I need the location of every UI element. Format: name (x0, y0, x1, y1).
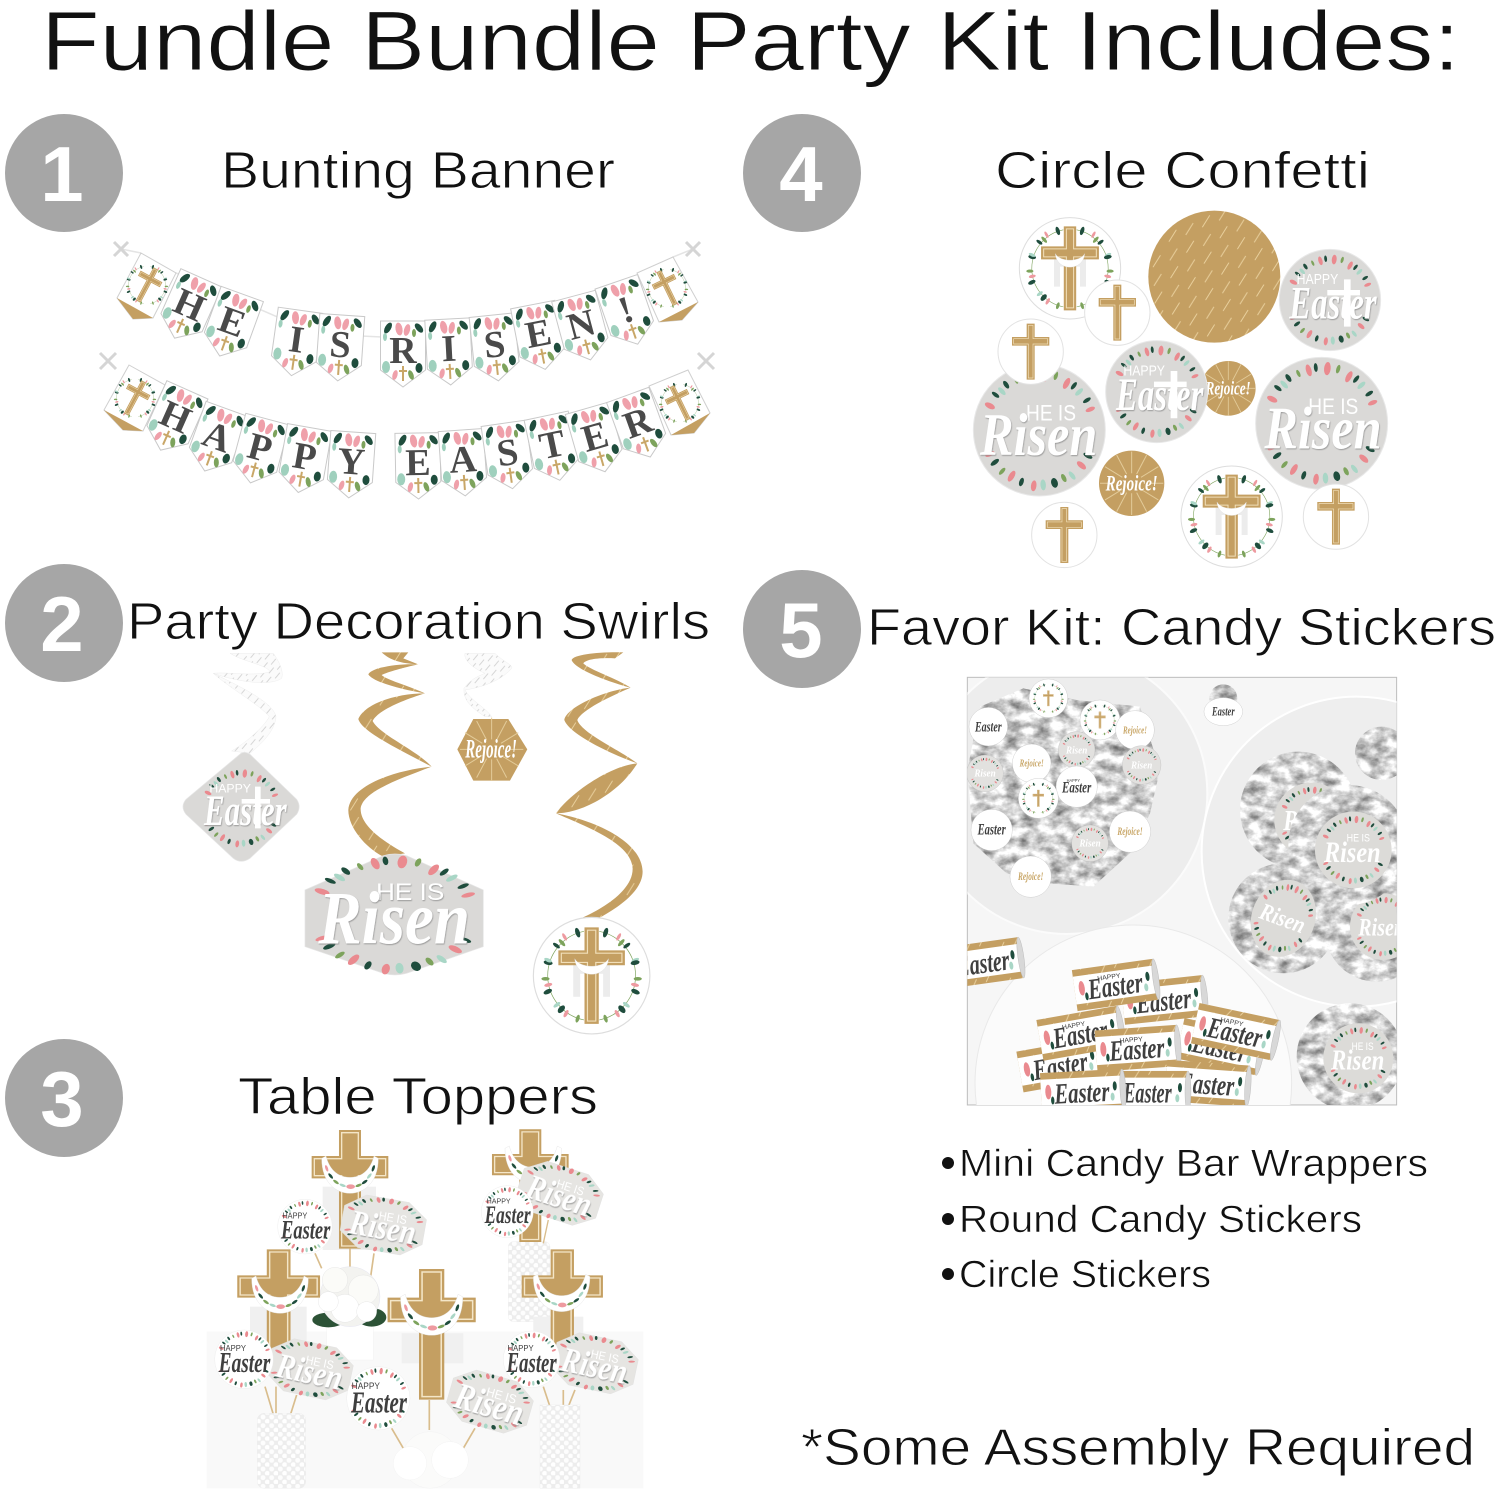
table backdrop (207, 1332, 643, 1488)
confetti: Happy Easter centre: Easter (1115, 369, 1204, 421)
flower vase (312, 1267, 386, 1360)
swirl: gold with He Is Risen hexagon (305, 652, 483, 975)
swirl: gold with He Is Risen hexagon: Risen (317, 877, 470, 960)
banner: He Is Risen!: R (389, 330, 417, 372)
footnote: *Some Assembly Required (801, 1419, 1475, 1477)
topper group: right cross (503, 1249, 641, 1488)
silver kisses pile (967, 679, 1243, 897)
banner: He Is Risen!: I (440, 328, 457, 370)
number badge 4: 4 (779, 130, 823, 218)
topper group: top left cross: HE IS (378, 1209, 408, 1227)
confetti: He Is Risen left (973, 364, 1105, 496)
heading: Bunting Banner: Bunting Banner (221, 142, 615, 200)
heading: Favor Kit: Candy Stickers: Favor Kit: Candy Stickers (867, 599, 1496, 657)
silver kisses pile: Risen (1130, 760, 1153, 771)
number badge 3 (5, 1039, 123, 1157)
topper group: centre cross: Risen (449, 1374, 529, 1433)
candy bar wrappers: Easter (1050, 1014, 1111, 1056)
topper group: centre cross: Easter (350, 1385, 408, 1419)
candy bar wrappers: Easter (1123, 1077, 1172, 1109)
number badge 5: 5 (779, 586, 823, 674)
swirl: white with Happy Easter diamond (183, 653, 299, 861)
topper group: top left cross: HAPPY (282, 1211, 308, 1220)
confetti circles (973, 211, 1388, 568)
heading: Circle Confetti: Circle Confetti (995, 142, 1370, 200)
candy bar wrappers: Easter (1053, 1076, 1111, 1111)
confetti: wreath cross (1019, 218, 1121, 319)
topper group: left cross: Easter (218, 1347, 271, 1379)
silver kisses pile: Risen (1065, 745, 1088, 756)
confetti: He Is Risen right (1256, 357, 1388, 489)
confetti: Happy Easter top right: HAPPY (1297, 272, 1338, 288)
silver kisses pile: Easter (1061, 780, 1092, 797)
foil candy cups with stickers (1228, 726, 1397, 1105)
confetti: Happy Easter centre: HAPPY (1123, 364, 1165, 380)
swirl: gold with cross circle (533, 652, 650, 1034)
confetti: small cross (998, 319, 1063, 384)
confetti: Rejoice behind: Rejoice! (1205, 378, 1251, 399)
candy bar wrappers: HAPPY (1220, 1017, 1244, 1029)
banner: Happy Easter: P (289, 434, 320, 480)
topper group: left cross: HAPPY (220, 1343, 246, 1353)
candy bar wrappers: Easter (1030, 1046, 1091, 1087)
banner: Happy Easter: T (536, 422, 569, 468)
section 3: table toppers (5, 1039, 643, 1488)
silver kisses pile: Rejoice! (1122, 725, 1147, 736)
foil candy cups with stickers: HE IS (1347, 833, 1370, 845)
silver kisses pile: Easter (974, 719, 1002, 735)
number badge 5 (743, 570, 861, 688)
foil candy cups with stickers: Risen (1323, 837, 1381, 869)
heading: Party Decoration Swirls: Party Decoration Swirls (127, 593, 710, 651)
confetti: gold dashes circle (1148, 211, 1280, 343)
candy bar wrappers: HAPPY (1062, 1021, 1086, 1032)
banner: He Is Risen!: E (522, 311, 555, 357)
topper group: left cross (215, 1249, 356, 1488)
banner: Happy Easter: A (448, 438, 478, 482)
number badge 1: 1 (40, 130, 84, 218)
section 4: circle confetti (743, 114, 1388, 568)
silver kisses pile: Risen (1078, 839, 1101, 850)
topper group: top left cross (278, 1130, 429, 1277)
confetti: Happy Easter top right: Easter (1289, 277, 1377, 329)
candy bar wrappers: HAPPY (1097, 972, 1121, 983)
topper group: top right cross: Risen (521, 1167, 597, 1225)
banner: Happy Easter: Y (336, 440, 366, 484)
banner: Happy Easter: E (405, 442, 431, 484)
banner: He Is Risen!: S (328, 323, 352, 367)
candy bar wrappers (967, 936, 1281, 1105)
section 2: party decoration swirls (5, 564, 710, 1034)
foil candy cups with stickers: Risen (1358, 914, 1405, 942)
topper group: centre cross: HAPPY (352, 1381, 381, 1391)
silver kisses pile: Rejoice! (1117, 826, 1143, 838)
topper group: right cross: HE IS (589, 1347, 620, 1366)
foil candy cups with stickers: Risen (1330, 1046, 1384, 1077)
banner: Happy Easter: H (153, 392, 197, 442)
topper group: top right cross: Easter (484, 1201, 531, 1229)
topper group: centre cross (347, 1269, 538, 1488)
bullet: Round Candy Stickers: Round Candy Stickers (959, 1199, 1362, 1241)
topper group: left cross: HE IS (304, 1353, 335, 1372)
table toppers scene (207, 1129, 643, 1488)
number badge 3: 3 (40, 1055, 84, 1143)
banner: Happy Easter: E (577, 413, 613, 461)
confetti: small cross (1303, 484, 1369, 549)
confetti: wreath cross (1181, 466, 1282, 567)
candy bar wrappers: Easter (1189, 1027, 1250, 1070)
topper group: top right cross: HE IS (555, 1177, 586, 1199)
candy bar wrappers: HAPPY (1119, 1036, 1144, 1045)
candy photo (966, 676, 1398, 1106)
topper group: right cross: Risen (557, 1340, 631, 1392)
confetti: He Is Risen left: HE IS (1026, 401, 1076, 426)
silver kisses pile: Easter (977, 822, 1006, 839)
banner: He Is Risen!: ! (613, 288, 639, 332)
confetti: He Is Risen right: Risen (1263, 395, 1382, 461)
plates (967, 677, 1397, 1105)
heading: Table Toppers: Table Toppers (238, 1068, 598, 1126)
number badge 1 (5, 114, 123, 232)
swirls (183, 652, 650, 1034)
confetti: Happy Easter top right (1279, 249, 1381, 351)
topper group: right cross: Easter (506, 1348, 557, 1379)
foil candy cups with stickers: Risen (1255, 899, 1309, 939)
confetti: Rejoice (1099, 451, 1164, 516)
banner: Happy Easter: S (494, 431, 521, 475)
banner: He Is Risen!: S (482, 323, 507, 367)
candy bar wrappers: Easter (1108, 1032, 1166, 1068)
swirl: white with Rejoice hexagon: Rejoice! (465, 734, 517, 763)
swirl: white with Happy Easter diamond: Easter (203, 787, 287, 835)
section 1: bunting banner (5, 114, 714, 499)
number badge 2: 2 (40, 580, 84, 668)
banner: He Is Risen! (114, 242, 700, 387)
bullet: Circle Stickers: Circle Stickers (959, 1254, 1211, 1296)
topper group: centre cross: HE IS (485, 1385, 518, 1407)
candy bar wrappers: Easter (1177, 1067, 1236, 1103)
topper group: top right cross: HAPPY (487, 1196, 511, 1205)
silver kisses pile: Risen (973, 769, 996, 780)
silver kisses pile: Rejoice! (1019, 759, 1044, 770)
banner: He Is Risen!: N (563, 301, 600, 349)
confetti: Happy Easter centre (1106, 341, 1208, 443)
number badge 4 (743, 114, 861, 232)
confetti: Rejoice: Rejoice! (1105, 471, 1158, 496)
topper group: top left cross: Risen (346, 1202, 419, 1252)
banner: Happy Easter (100, 353, 714, 499)
candy bar wrappers: Easter (1134, 983, 1193, 1020)
confetti: small cross (1085, 280, 1150, 345)
foil candy cups with stickers: HE IS (1352, 1041, 1374, 1053)
topper group: right cross: HAPPY (508, 1343, 534, 1353)
swirl: white with Rejoice hexagon (457, 653, 527, 781)
banner: He Is Risen!: I (286, 318, 307, 362)
banner: Happy Easter: P (243, 425, 276, 471)
banner: Happy Easter: R (618, 399, 659, 448)
silver kisses pile: Easter (1211, 705, 1235, 719)
candy bar wrappers: Easter (1085, 967, 1145, 1006)
candy bar wrappers: Easter (953, 944, 1012, 984)
topper group: top right cross (481, 1129, 608, 1322)
confetti: He Is Risen left: Risen (979, 402, 1097, 468)
foil candy cups with stickers: Risen (1282, 806, 1337, 837)
banner: He Is Risen!: H (167, 280, 211, 330)
topper group: top left cross: Easter (280, 1215, 331, 1245)
swirl: gold with He Is Risen hexagon: HE IS (376, 879, 444, 906)
silver kisses pile: HAPPY (1067, 778, 1080, 783)
banner: He Is Risen!: E (213, 298, 251, 346)
bullet: Mini Candy Bar Wrappers: Mini Candy Bar Wrappers (959, 1143, 1428, 1185)
silver kisses pile: Rejoice! (1017, 871, 1043, 883)
confetti: small cross (1032, 502, 1097, 568)
swirl: white with Happy Easter diamond: HAPPY (209, 781, 251, 795)
section 5: favor kit candy stickers (743, 570, 1500, 1296)
confetti: He Is Risen right: HE IS (1308, 394, 1358, 419)
candy bar wrappers: Easter (1204, 1012, 1265, 1055)
banner: Happy Easter: A (197, 413, 238, 462)
bullet list (942, 1143, 1428, 1296)
number badge 2 (5, 564, 123, 682)
confetti: Rejoice behind (1201, 361, 1256, 416)
topper group: left cross: Risen (272, 1346, 346, 1398)
